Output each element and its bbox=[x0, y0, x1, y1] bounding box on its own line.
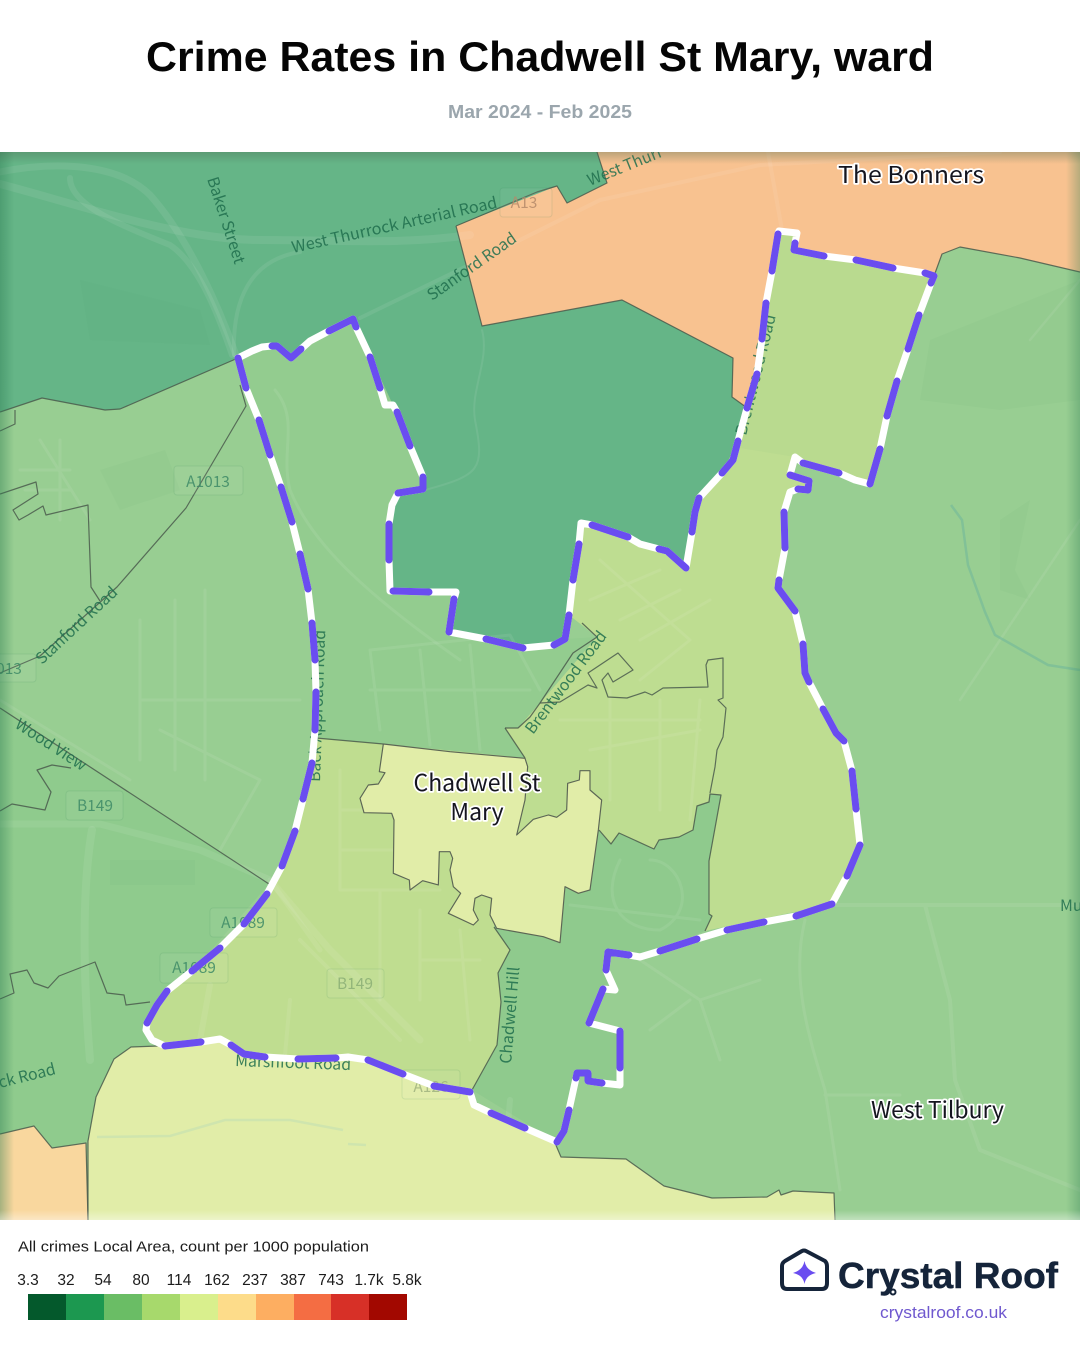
legend scale labels: 162 bbox=[204, 1272, 230, 1289]
place: Chadwell St Mary: Chadwell St bbox=[414, 764, 541, 798]
shield: A1089 upper: A1089 bbox=[221, 911, 265, 933]
label: Stanford Road west: Stanford Road bbox=[30, 580, 122, 669]
shield: B149 west bbox=[66, 791, 123, 820]
place: The Bonners: The Bonners bbox=[838, 156, 984, 190]
label: West Thurrock Arterial Road: West Thurrock Arterial Road bbox=[289, 190, 499, 258]
region: very light Chadwell centre bbox=[360, 744, 602, 943]
region: light green ward east bbox=[506, 446, 856, 931]
legend colour bar bbox=[28, 1294, 407, 1320]
ward outline white bbox=[146, 231, 934, 1142]
logo wordmark: Crystal Roof bbox=[838, 1255, 1059, 1296]
place labels: Mary bbox=[450, 793, 504, 827]
legend scale labels: 1.7k bbox=[354, 1272, 384, 1289]
legend scale labels: 32 bbox=[57, 1272, 75, 1289]
label: Baker Street: Baker Street bbox=[202, 173, 252, 266]
ward boundary: white line with purple dashes bbox=[146, 231, 934, 1142]
title: Crime Rates in Chadwell St Mary, ward bbox=[146, 33, 934, 80]
logo url: crystalroof.co.uk bbox=[880, 1304, 1008, 1322]
region: lighter green north field bbox=[740, 233, 934, 484]
shield: A1089 upper bbox=[210, 908, 277, 937]
legend scale labels: 114 bbox=[167, 1272, 192, 1289]
legend scale labels: 743 bbox=[318, 1272, 344, 1289]
region: green lower middle bbox=[472, 794, 721, 1142]
label: Brentwood Road centre: Brentwood Road bbox=[519, 625, 611, 738]
ward dashes purple bbox=[147, 234, 934, 1142]
shield: A1013 west bbox=[0, 654, 36, 682]
region: ward interior north-west bbox=[380, 378, 392, 402]
label: Marshfoot Road: Marshfoot Road bbox=[235, 1048, 351, 1075]
legend scale labels: 5.8k bbox=[392, 1272, 422, 1289]
shield: B149 south: B149 bbox=[337, 972, 373, 994]
legend title: All crimes Local Area, count per 1000 population bbox=[18, 1238, 369, 1256]
label: Wood View: Wood View bbox=[11, 712, 92, 776]
label: Stanford Road north: Stanford Road bbox=[422, 226, 521, 305]
river: east stream bbox=[951, 505, 1080, 670]
shield: A1089 lower: A1089 bbox=[172, 956, 216, 978]
region: yellow-green south bbox=[88, 1039, 835, 1220]
shield: A13: A13 bbox=[511, 191, 537, 213]
shield: A1089 lower bbox=[160, 953, 228, 983]
label: West Thurrock top: West Thurr bbox=[583, 139, 667, 191]
logo: Crystal Roof bbox=[782, 1250, 1059, 1322]
shield: A13 bbox=[500, 188, 552, 217]
subtitle: date range: Mar 2024 - Feb 2025 bbox=[448, 101, 632, 122]
legend scale labels: 80 bbox=[132, 1272, 150, 1289]
region boundaries bbox=[0, 152, 1080, 1220]
fields and shaded land bbox=[80, 280, 1080, 1210]
legend scale labels: 3.3 bbox=[17, 1272, 39, 1289]
label: Brentwood Road north: Brentwood Road bbox=[729, 312, 781, 437]
road labels bbox=[0, 139, 1080, 1093]
road network bbox=[2, 162, 782, 1062]
shield: A1013 east: A1013 bbox=[186, 470, 230, 492]
region: light green ward south-west bbox=[146, 738, 525, 1090]
river: south channel bbox=[97, 1120, 366, 1145]
region: green lower left bbox=[0, 708, 269, 1148]
shield: B149 west: B149 bbox=[77, 794, 113, 816]
region: orange north bbox=[456, 152, 1080, 410]
legend scale labels: 54 bbox=[94, 1272, 112, 1289]
road shields bbox=[0, 188, 552, 1099]
shield: A126 bbox=[402, 1070, 460, 1099]
map edge shading bbox=[0, 152, 1080, 1220]
logo y loop bbox=[890, 1290, 896, 1294]
icon: house with star bbox=[782, 1250, 827, 1289]
label: Back Approach Road: Back Approach Road bbox=[302, 629, 330, 782]
shield: A126: A126 bbox=[413, 1075, 449, 1097]
region: base green east bbox=[0, 152, 1080, 1220]
region: dark green north-west and centre bbox=[0, 152, 750, 648]
shield: B149 south bbox=[327, 969, 384, 998]
river: south channel on yellow bbox=[97, 1120, 366, 1145]
legend bbox=[17, 1238, 422, 1320]
label: Chadwell Hill: Chadwell Hill bbox=[493, 966, 524, 1064]
legend scale labels: 237 bbox=[242, 1272, 268, 1289]
shield: A1013 east bbox=[174, 466, 243, 495]
legend scale labels: 387 bbox=[280, 1272, 306, 1289]
place: West Tilbury: West Tilbury bbox=[871, 1091, 1004, 1125]
legend scale labels bbox=[17, 1272, 422, 1289]
region: pale orange south-west bbox=[0, 1126, 88, 1220]
place labels bbox=[414, 156, 1004, 1125]
